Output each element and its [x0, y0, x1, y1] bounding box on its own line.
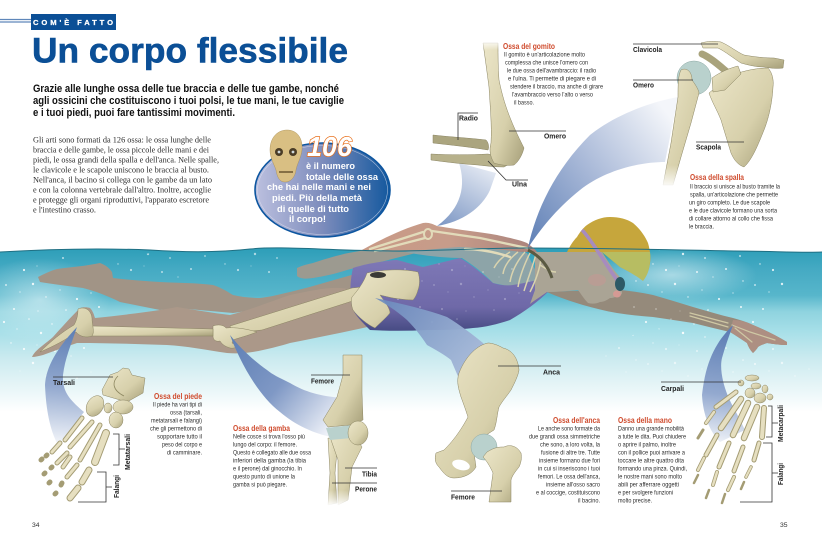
leg text: Ossa della gamba [233, 424, 291, 433]
body text: e l'intestino crasso. [33, 206, 96, 214]
callout text: di quelle di tutto [277, 204, 350, 214]
body text: piedi, le ossa grandi della spalla e dell'anca. Nelle spalle, [33, 156, 219, 164]
callout text: è il numero [306, 161, 356, 171]
rear leg [38, 263, 372, 313]
knee bones [323, 355, 368, 506]
hand text: e per svolgere funzioni [618, 490, 673, 496]
shoulder text: spalla, un'articolazione che permette [690, 192, 778, 198]
swim cap [567, 217, 650, 280]
pelvis bones [351, 270, 420, 328]
upper arm bones [370, 229, 527, 257]
leg text: Nelle cosce si trova l'osso più [233, 434, 305, 440]
hip text: femori. Le ossa dell'anca, [538, 474, 600, 480]
foot text: peso del corpo e [162, 442, 202, 448]
shoulder text: Ossa della spalla [690, 173, 745, 182]
beam: elbow [437, 163, 496, 226]
neck and face [530, 252, 622, 304]
elbow text: complessa che unisce l'omero con [505, 60, 588, 66]
label: Femore [451, 491, 502, 502]
body text: e protegge gli organi riproduttivi, l'apparato escretore [33, 196, 209, 204]
label: Tibia: Tibia [362, 470, 378, 478]
intro text: agli ossicini che costituiscono i tuoi polsi, le tue mani, le tue caviglie [33, 95, 344, 107]
elbow bones [431, 40, 524, 167]
hip text: Ossa dell'anca [553, 416, 601, 425]
rear forearm under water [297, 251, 420, 279]
label: Scapola: Scapola [696, 142, 722, 152]
hand text: Danno una grande mobilità [618, 426, 684, 432]
body text: braccia e delle gambe, le ossa piccole delle mani e dei [33, 146, 210, 154]
label: Omero [633, 80, 693, 90]
beam: hand [702, 325, 745, 442]
foot text: metatarsali e falangi) [151, 418, 202, 424]
label: Perone: Perone [355, 484, 377, 494]
elbow text: Il gomito è un'articolazione molto [504, 52, 585, 58]
intro text [33, 83, 344, 119]
hip text: fusione di altre tre. Tutte [541, 450, 600, 456]
foot text: che gli permettono di [150, 426, 202, 432]
elbow text: Ossa del gomito [503, 42, 555, 51]
number 106: 106 [307, 131, 352, 162]
label: Anca: Anca [543, 368, 561, 376]
body text: e con la colonna vertebrale dall'altro. Inoltre, accoglie [33, 186, 211, 194]
shoulder bones [655, 41, 784, 188]
label: Falangi [78, 472, 121, 502]
label: Ulna [488, 161, 528, 188]
label: Metacarpali: Metacarpali [776, 405, 785, 442]
label: Tarsali: Tarsali [53, 378, 75, 387]
label: Falangi: Falangi [776, 463, 785, 485]
foot text: ossa (tarsali, [170, 410, 202, 416]
foot text: di camminare. [167, 450, 202, 456]
panel: hip [435, 343, 601, 504]
waterline [0, 248, 822, 252]
hip text: il bacino. [578, 498, 600, 504]
foot text [150, 392, 203, 456]
hand [730, 320, 787, 353]
swimmer [32, 217, 787, 357]
callout text [267, 161, 379, 224]
beam: foot [45, 327, 84, 445]
hip text: che sono, a loro volta, la [540, 442, 600, 448]
callout text: che hai nelle mani e nei [267, 182, 371, 192]
hip text: Le anche sono formate da [538, 426, 600, 432]
oval [255, 143, 390, 237]
cheek [588, 274, 606, 286]
panel: shoulder [633, 41, 784, 231]
shoulder text: e le due clavicole formano una sorta [689, 208, 777, 214]
nose [613, 290, 621, 298]
label: Femore: Femore [451, 492, 475, 502]
beam: hip [375, 298, 500, 395]
femur and shin bones [40, 286, 372, 352]
label: Scapola [696, 142, 744, 152]
spine [528, 250, 552, 278]
panel: foot [41, 368, 203, 502]
hand text: Ossa della mano [618, 416, 672, 425]
label: Carpali: Carpali [661, 384, 684, 393]
callout: 106 bones [255, 130, 390, 237]
leg text: e il perone) dal ginocchio. In [233, 466, 302, 472]
callout text: piedi. Più della metà [272, 193, 363, 203]
swimsuit [350, 258, 550, 331]
swim cap under water [602, 252, 650, 281]
shoulder text: le braccia. [689, 224, 714, 230]
front arm [547, 290, 787, 353]
front leg [32, 288, 372, 357]
label: Metacarpali [766, 405, 785, 442]
page number 34: 34 [32, 522, 40, 529]
hip text: due grandi ossa simmetriche [529, 434, 600, 440]
hip text: e al coccige, costituiscono [536, 490, 600, 496]
foot text: sopportare tutto il [157, 434, 202, 440]
leg text: lungo del corpo: il femore. [233, 442, 297, 448]
leg text [233, 424, 311, 488]
body text: Gli arti sono formati da 126 ossa: le ossa lunghe delle [33, 136, 211, 144]
hip text: in cui si inseriscono i tuoi [538, 466, 600, 472]
hand text: le nostre mani sono molto [618, 474, 682, 480]
label: Tibia [345, 468, 378, 478]
label: Clavicola: Clavicola [633, 45, 663, 54]
hip text [529, 416, 601, 504]
callout text: totale delle ossa [306, 172, 379, 182]
label: Femore [311, 375, 350, 386]
label: Femore: Femore [311, 376, 334, 386]
shoulder text: Il braccio si unisce al busto tramite la [690, 184, 780, 190]
elbow text: il basso. [514, 100, 534, 106]
intro text: e i tuoi piedi, puoi fare tantissimi movimenti. [33, 107, 235, 119]
page number 35: 35 [780, 522, 788, 529]
pelvis notch [370, 272, 386, 278]
label: Radio [458, 113, 478, 140]
hand text: toccare le altre quattro dita [618, 458, 684, 464]
arm above water [360, 223, 537, 252]
body text: Nell'anca, il bacino si collega con le gambe da un lato [33, 176, 212, 184]
hand bones [694, 375, 773, 503]
label: Falangi: Falangi [112, 475, 121, 498]
label: Anca [498, 366, 561, 376]
goggles lens [615, 277, 625, 291]
label: Tarsali [53, 377, 113, 387]
elbow text [503, 42, 603, 106]
label: Falangi [740, 443, 785, 502]
elbow text: e l'ulna. Ti permette di piegare e di [508, 76, 596, 82]
label: Omero: Omero [544, 132, 566, 140]
body text [33, 136, 219, 214]
arm bubbles [615, 298, 745, 322]
hand text: con il pollice puoi arrivare a [618, 450, 685, 456]
hand text [618, 416, 687, 504]
elbow text: le due ossa dell'avambraccio: il radio [507, 68, 596, 74]
label: Carpali [661, 382, 741, 393]
callout text: il corpo! [289, 214, 326, 224]
hip text: insieme formano due fori [539, 458, 600, 464]
hand text: a tutte le dita. Puoi chiudere [618, 434, 686, 440]
label: Metatarsali: Metatarsali [123, 434, 132, 470]
leg text: Questo è collegato alle due ossa [233, 450, 311, 456]
oval inner ring [258, 146, 388, 234]
header tag: COM'È FATTO [33, 18, 113, 27]
leg text: gamba si può piegare. [233, 482, 287, 488]
goggles strap [582, 230, 617, 280]
foot text: Il piede ha vari tipi di [153, 402, 202, 408]
shoulder under water [405, 247, 545, 290]
foot text: Ossa del piede [154, 392, 203, 401]
label: Omero [509, 131, 566, 140]
hip text: insieme all'osso sacro [546, 482, 600, 488]
title: Un corpo flessibile [32, 32, 348, 70]
callout beams [45, 97, 745, 445]
body text: le clavicole e le scapole uniscono le braccia al busto. [33, 166, 209, 174]
torso bubbles [365, 255, 535, 325]
water band [0, 245, 822, 412]
forearm bones [690, 313, 775, 342]
shoulder text [689, 173, 780, 230]
label: Ulna: Ulna [512, 180, 528, 188]
header tag [0, 14, 116, 30]
beam: leg [230, 335, 342, 437]
label: Perone [332, 483, 377, 494]
beam: shoulder [528, 97, 678, 248]
icon: skull [270, 130, 302, 182]
rib cage [494, 252, 556, 292]
label: Metatarsali [113, 434, 132, 470]
leg text: questo punto di unione la [233, 474, 295, 480]
hand text: molto precise. [618, 498, 652, 504]
hand text: o aprire il palmo, inoltre [618, 442, 676, 448]
intro text: Grazie alle lunghe ossa delle tue braccia e delle tue gambe, nonché [33, 83, 339, 95]
hand text: formando una pinza. Quindi, [618, 466, 687, 472]
elbow text: l'avambraccio verso l'alto o verso [512, 92, 593, 98]
foot bones [41, 368, 145, 498]
leg text: inferiori della gamba (la tibia [233, 458, 306, 464]
label: Clavicola [633, 44, 718, 54]
panel: elbow [431, 40, 603, 188]
hip bones [435, 343, 521, 502]
elbow text: stendere il braccio, ma anche di girare [510, 84, 603, 90]
panel: hand [618, 375, 785, 504]
panel: leg [233, 355, 378, 506]
shoulder text: di collare attorno al collo che fissa [689, 216, 773, 222]
hand text: abili per afferrare oggetti [618, 482, 679, 488]
label: Radio: Radio [459, 114, 478, 122]
label: Omero: Omero [633, 80, 654, 90]
shoulder text: un giro completo. Le due scapole [689, 200, 770, 206]
